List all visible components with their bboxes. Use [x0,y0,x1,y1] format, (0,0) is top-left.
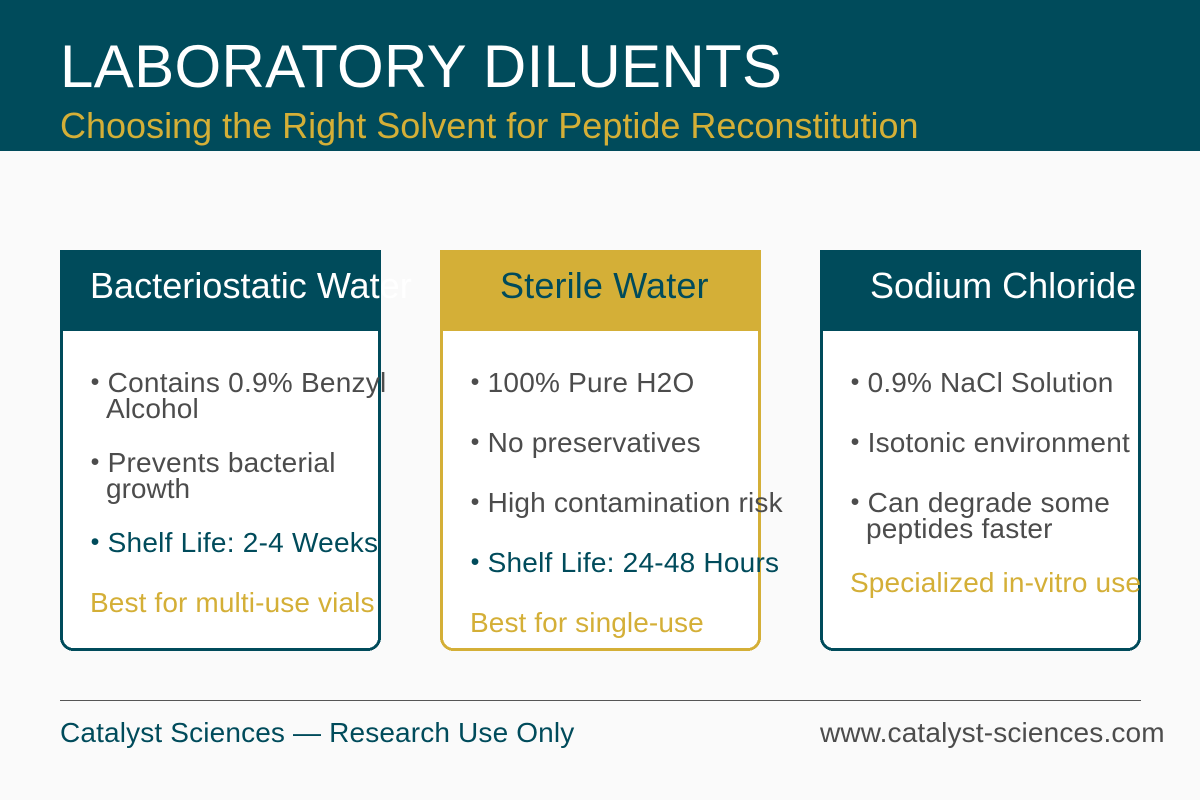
bullet list: Can degrade some [868,487,1110,518]
bullet list [851,367,1130,544]
bullet list: Shelf Life: 24-48 Hours [488,547,779,578]
bullet list: Isotonic environment [868,427,1130,458]
card heading: Sodium Chloride [870,265,1136,306]
panel: Sodium Chloride [820,250,1141,650]
bullet list: • [91,368,99,396]
bullet list: High contamination risk [488,487,784,518]
footer: website: www.catalyst-sciences.com [819,717,1165,748]
bullet list: Prevents bacterial [108,447,336,478]
bullet list: growth [106,473,190,504]
bullet list [91,367,387,558]
header band [0,0,1200,151]
footer: brand: Catalyst Sciences — Research Use Only [60,717,574,748]
bullet list: Shelf Life: 2-4 Weeks [108,527,378,558]
bullet list: • [91,528,99,556]
best use note: Best for single-use [470,607,704,638]
bullet list: • [851,428,859,456]
bullet list: No preservatives [488,427,701,458]
bullet list: • [471,428,479,456]
bullet list: peptides faster [866,513,1053,544]
card heading: Bacteriostatic Water [90,265,412,306]
best use note: Best for multi-use vials [90,587,375,618]
title: LABORATORY DILUENTS [60,33,782,100]
bullet list: 0.9% NaCl Solution [868,367,1113,398]
subtitle: Choosing the Right Solvent for Peptide Reconstitution [60,105,919,146]
bullet list: • [471,488,479,516]
bullet list [471,367,784,578]
card heading: Sterile Water [500,265,709,306]
bullet list: • [471,548,479,576]
bullet list: • [91,448,99,476]
bullet list: 100% Pure H2O [488,367,694,398]
panel: Sterile Water [440,250,784,650]
bullet list: Alcohol [106,393,199,424]
bullet list: Contains 0.9% Benzyl [108,367,387,398]
bullet list: • [471,368,479,396]
best use note: Specialized in-vitro use [850,567,1141,598]
bullet list: • [851,368,859,396]
panel: Bacteriostatic Water [60,250,412,650]
bullet list: • [851,488,859,516]
